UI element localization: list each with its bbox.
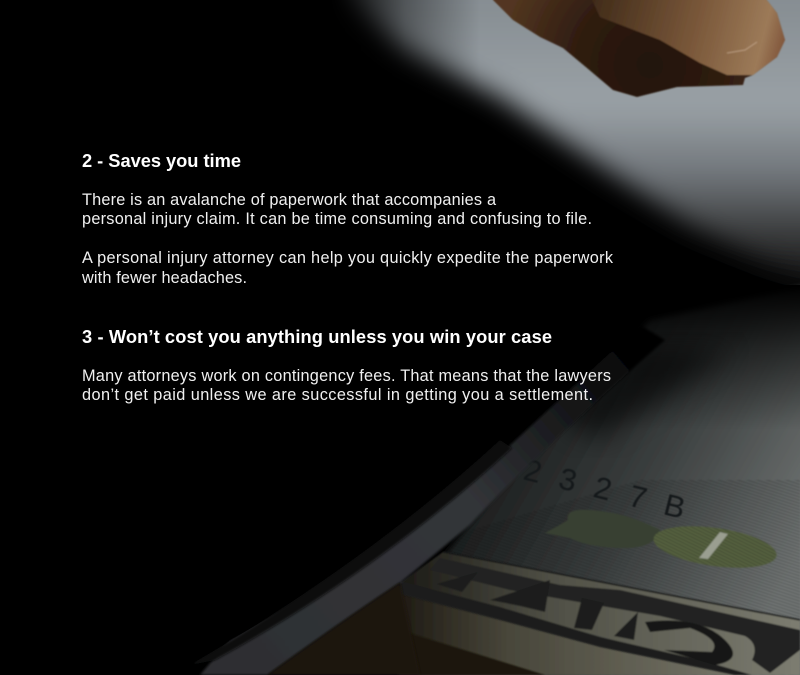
bill hatch texture — [400, 480, 800, 675]
dark fade at top of bill — [420, 285, 800, 435]
dark smudge on bill — [560, 350, 730, 440]
paragraph: attorney help: A personal injury attorney can help you quickly expedite the paperwork — [82, 249, 614, 267]
shadowed bill pattern on dark page — [190, 440, 512, 665]
lower bill paper — [400, 586, 745, 675]
text block: contingency — [82, 326, 611, 404]
banner with lettering — [400, 552, 800, 675]
paragraph: paperwork avalanche — [82, 191, 592, 228]
paragraph: attorney help — [81, 249, 614, 287]
heading: section 3: 3 - Won’t cost you anything unless you win your case — [82, 326, 552, 347]
bill serial number: 2327B — [520, 452, 689, 526]
heading: section 2: 2 - Saves you time — [82, 150, 241, 171]
photo: dollar bill — [400, 285, 800, 675]
paragraph: attorney help: with fewer headaches. — [81, 269, 247, 287]
paragraph: contingency fees — [82, 367, 611, 404]
bill green numerals — [545, 510, 779, 574]
dark brown surface below bill — [400, 630, 545, 675]
bill surface — [400, 285, 800, 675]
paragraph: contingency fees: Many attorneys work on contingency fees. That means that the lawyers — [82, 367, 611, 385]
paragraph: paperwork avalanche: personal injury claim. It can be time consuming and confusing to file. — [82, 210, 592, 228]
photo: paper sheet under the hand — [0, 0, 800, 300]
text block: saves you time — [81, 150, 614, 287]
photo: hand with fingertip — [493, 0, 785, 97]
paragraph: contingency fees: don’t get paid unless we are successful in getting you a settlement. — [82, 386, 593, 404]
photo: curled paper edge band — [0, 300, 665, 675]
paragraph: paperwork avalanche: There is an avalanche of paperwork that accompanies a — [82, 191, 497, 209]
